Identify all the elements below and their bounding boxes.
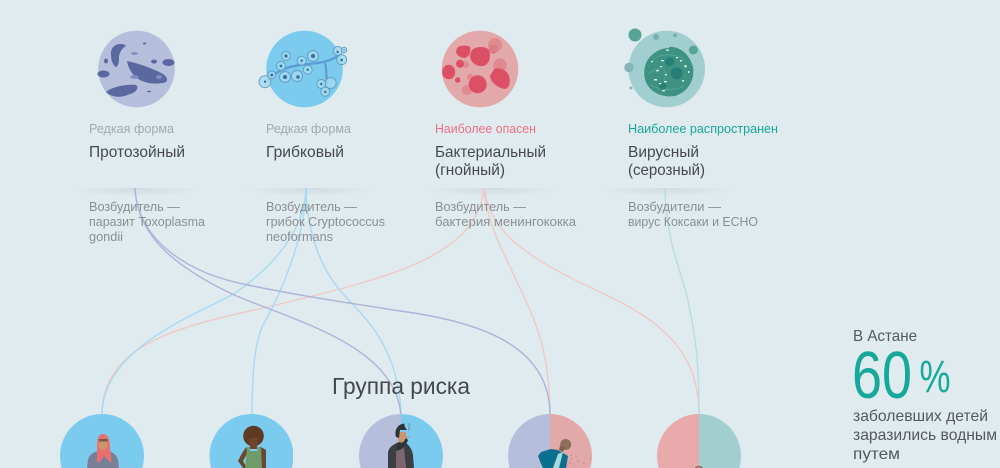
- column: bacterial: [435, 31, 577, 229]
- figure: grandmother: [87, 434, 119, 468]
- label: most dangerous: Наиболее опасен: [435, 121, 536, 136]
- person: man coughing: [508, 414, 592, 468]
- column: protozoan: [89, 31, 206, 244]
- column: fungal: [259, 31, 385, 244]
- heading: viral: [628, 144, 705, 179]
- heading: bacterial: Бактериальный: [435, 144, 546, 161]
- text: pathogen: Возбудитель —: [89, 199, 180, 214]
- text: pathogen: грибок Cryptococcus: [266, 214, 385, 229]
- icon: fungal cells: [259, 31, 347, 107]
- person: young woman: [209, 414, 293, 468]
- column: viral: [624, 28, 778, 229]
- text: pathogen: [89, 199, 206, 244]
- stat: Astana 60%: [852, 328, 997, 463]
- stat description: заболевших детей: [853, 408, 988, 425]
- text: pathogen: neoformans: [266, 229, 333, 244]
- stat number: 60: [852, 338, 912, 413]
- lines: bacterial: [102, 188, 699, 415]
- figure: woman with afro: [238, 426, 266, 468]
- lines: fungal: [102, 188, 401, 420]
- lines: protozoan: [135, 188, 550, 420]
- heading: bacterial: (гнойный): [435, 162, 505, 179]
- line: viral: [665, 188, 699, 415]
- text: pathogen: бактерия менингококка: [435, 214, 577, 229]
- stat description: путем: [853, 446, 900, 463]
- stat percent: %: [920, 351, 950, 402]
- icon: protozoan parasites: [98, 31, 175, 107]
- heading: protozoan: Протозойный: [89, 144, 185, 161]
- text: pathogen: вирус Коксаки и ECHO: [628, 214, 758, 229]
- label: most common: Наиболее распространен: [628, 121, 778, 136]
- label: rare form: Редкая форма: [266, 121, 352, 136]
- text: pathogen: паразит Toxoplasma: [89, 214, 206, 229]
- heading: viral: (серозный): [628, 162, 705, 179]
- figure: man smoking: [388, 423, 414, 468]
- text: pathogen: [435, 199, 577, 229]
- connection lines: [102, 188, 699, 420]
- figure: coughing man: [538, 439, 590, 468]
- text: pathogen: gondii: [89, 229, 123, 244]
- text: pathogen: [628, 199, 758, 229]
- stat description: заразились водным: [853, 427, 997, 444]
- stat label: В Астане: [853, 328, 917, 345]
- icon: virus: [624, 28, 705, 107]
- text: pathogen: Возбудитель —: [435, 199, 526, 214]
- person: smoker: [359, 414, 443, 468]
- heading: viral: Вирусный: [628, 144, 699, 161]
- title shadows: [72, 188, 735, 206]
- text: pathogen: Возбудитель —: [266, 199, 357, 214]
- heading: risk group: Группа риска: [332, 373, 470, 399]
- heading: bacterial: [435, 144, 546, 179]
- person: child: [657, 414, 741, 468]
- label: rare form: Редкая форма: [89, 121, 175, 136]
- stat description: [853, 408, 997, 463]
- heading: fungal: Грибковый: [266, 144, 344, 161]
- text: pathogen: Возбудители —: [628, 199, 721, 214]
- icon: bacteria: [442, 31, 518, 107]
- text: pathogen: [266, 199, 385, 244]
- figure: head top: [695, 466, 703, 468]
- person: elderly woman: [60, 414, 144, 468]
